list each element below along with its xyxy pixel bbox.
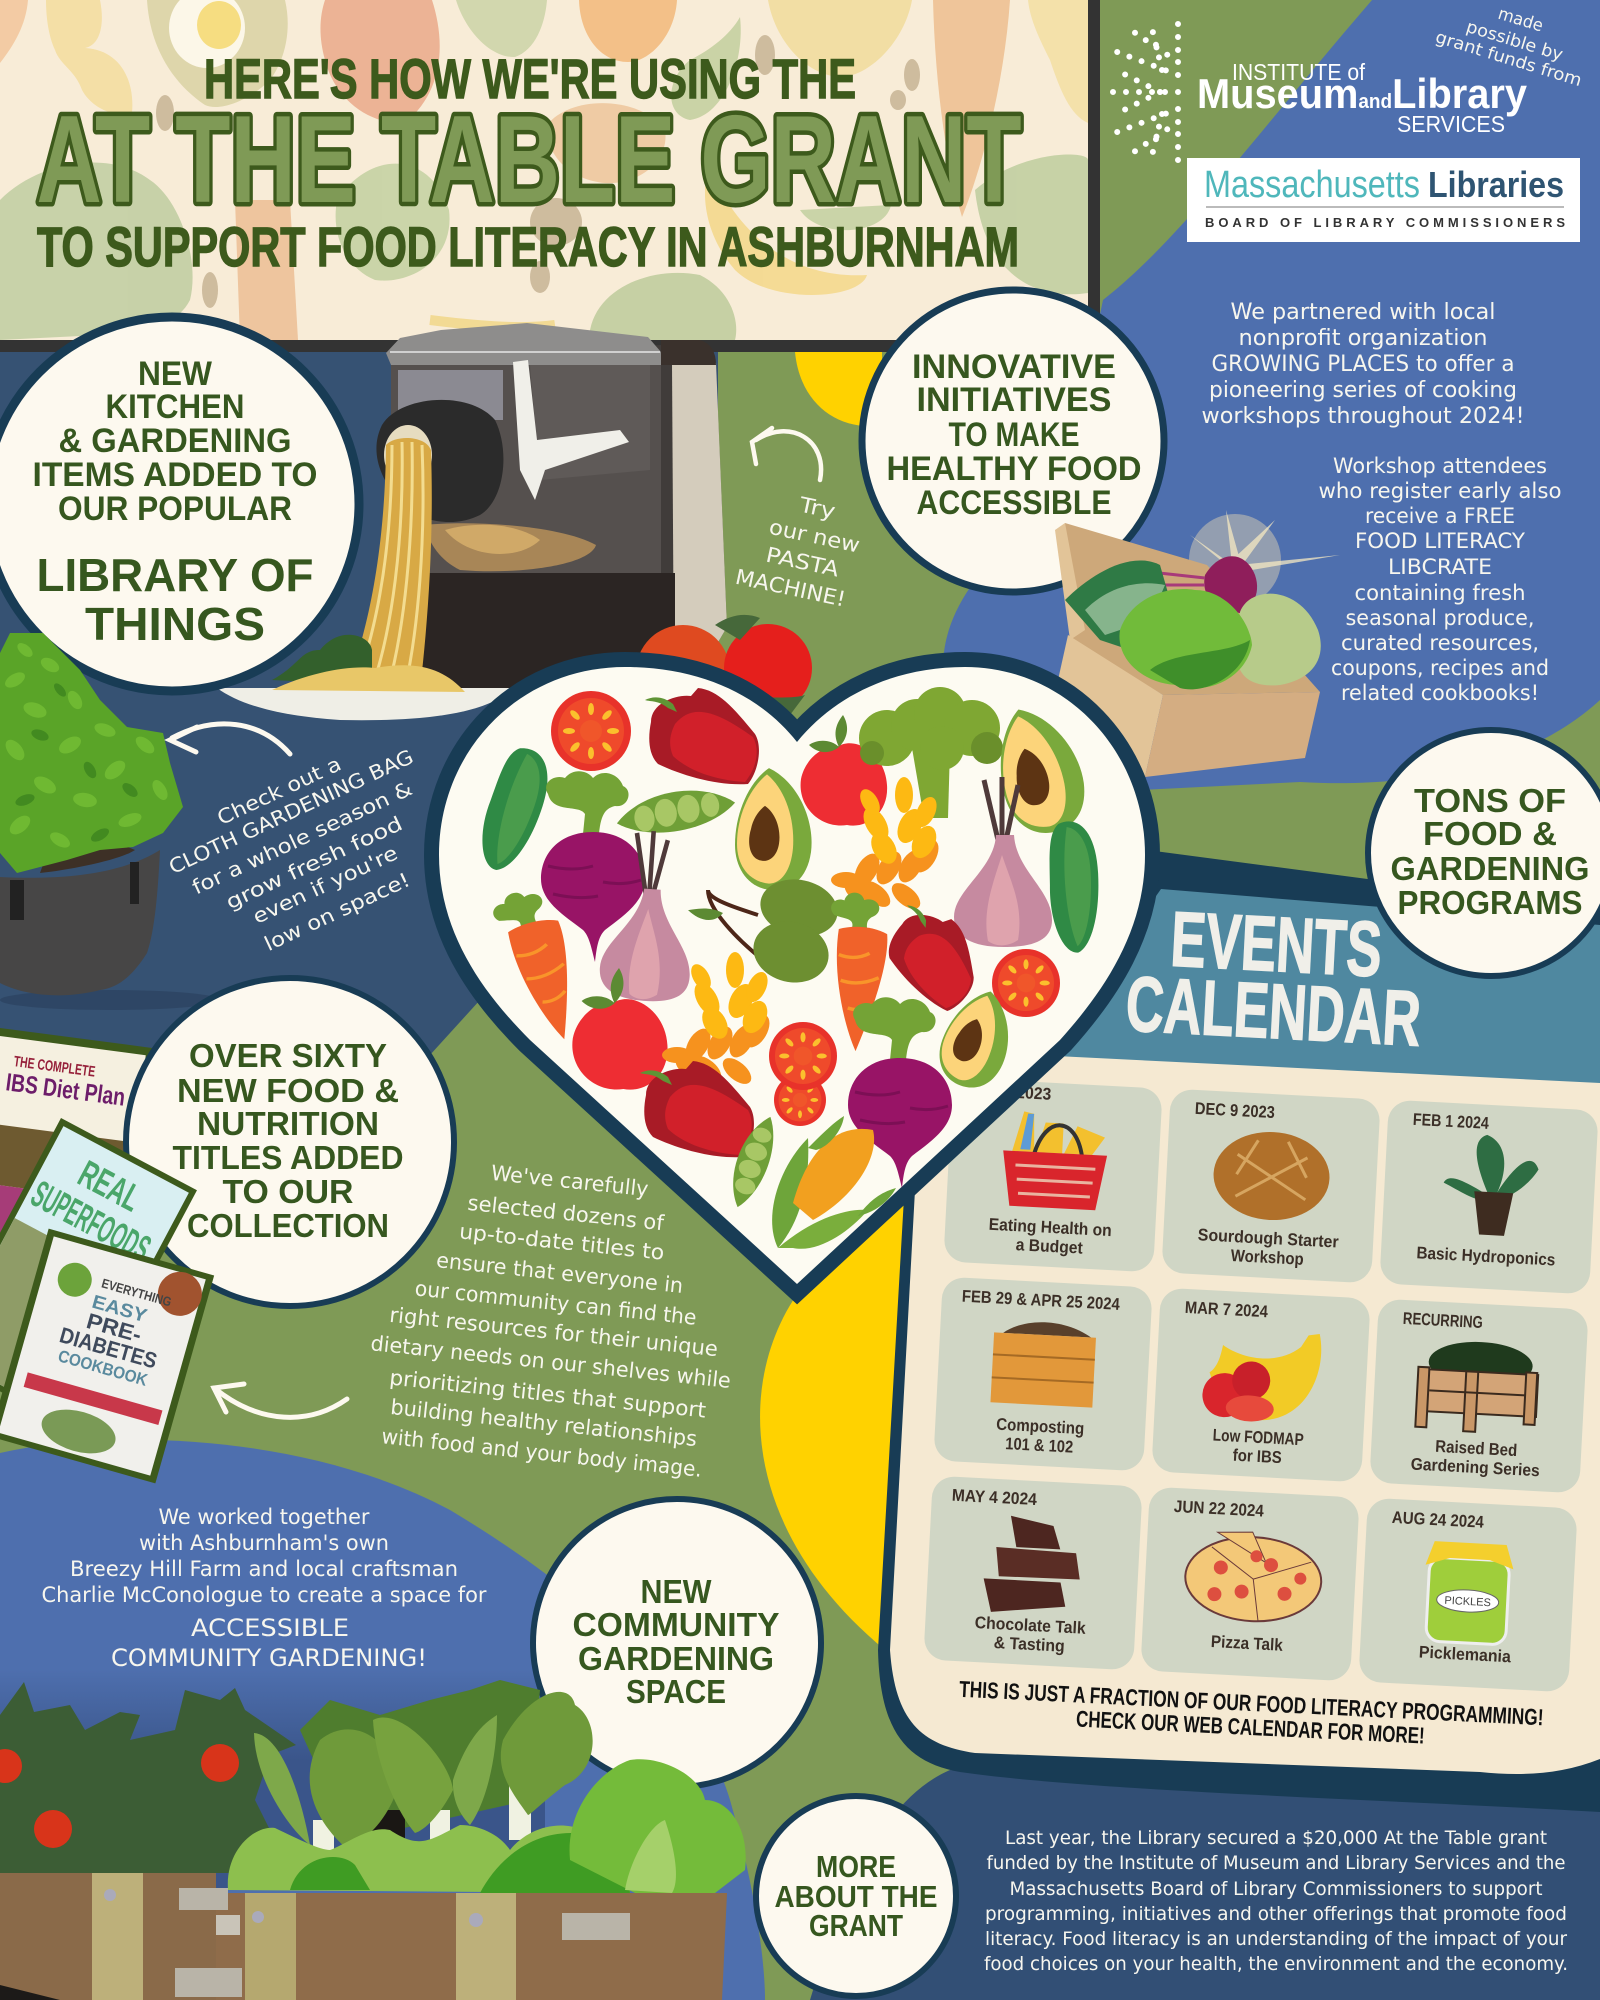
- event card: sourdough starter workshop: [1161, 1089, 1381, 1283]
- text: check out a cloth gardening bag: [165, 744, 417, 956]
- image: book easy pre-diabetes cookbook: EASY: [90, 1292, 149, 1327]
- text: fraction of our food literacy programming: CHECK OUR WEB CALENDAR FOR MORE!: [1075, 1706, 1425, 1749]
- event card: low fodmap for ibs: Low FODMAP: [1212, 1426, 1304, 1449]
- event card: basic hydroponics: [1379, 1100, 1599, 1294]
- image: lettuce: [228, 1759, 746, 1893]
- text: workshop attendees libcrate: [1318, 454, 1562, 705]
- panel: circle innovative initiatives: HEALTHY FOOD: [886, 450, 1142, 488]
- text: more about the grant paragraph: funded by the Institute of Museum and Library Services and the: [986, 1852, 1566, 1874]
- panel: circle library of things: KITCHEN: [106, 388, 244, 426]
- arrow: to pasta machine: [752, 428, 821, 480]
- panel: circle over sixty new titles: TO OUR: [222, 1173, 354, 1210]
- text: workshop attendees libcrate: coupons, recipes and: [1331, 656, 1549, 680]
- heading: events calendar: CALENDAR: [1124, 959, 1423, 1063]
- panel: circle more about the grant: MORE: [816, 1849, 896, 1884]
- text: workshop attendees libcrate: containing fresh: [1354, 581, 1526, 605]
- event card: picklemania: [1358, 1498, 1578, 1692]
- event card: composting: Composting: [996, 1415, 1085, 1438]
- panel: circle tons of food programs: FOOD &: [1423, 815, 1557, 852]
- panel: circle innovative initiatives: INNOVATIVE: [912, 348, 1116, 386]
- event card: chocolate talk and tasting: MAY 4 2024: [951, 1486, 1038, 1509]
- event card: picklemania: AUG 24 2024: [1391, 1508, 1485, 1532]
- panel: circle innovative initiatives: TO MAKE: [948, 416, 1080, 454]
- logo: Massachusetts Libraries: [1187, 158, 1580, 242]
- event card: basic hydroponics: FEB 1 2024: [1412, 1110, 1490, 1133]
- image: book ibs diet plan: [0, 1027, 155, 1311]
- image: raised garden bed with vegetables: [0, 1680, 746, 2000]
- panel: circle tons of food programs: PROGRAMS: [1398, 884, 1582, 921]
- image: bok choy: [254, 1680, 593, 1860]
- text: try our new pasta machine: MACHINE!: [733, 565, 848, 612]
- heading: events calendar: [1124, 895, 1423, 1063]
- image: pasta machine: [345, 323, 727, 690]
- image: book easy pre-diabetes cookbook: PRE-: [84, 1308, 144, 1347]
- text: check out a cloth gardening bag: for a whole season &: [188, 776, 416, 899]
- panel: circle library of things: & GARDENING: [58, 422, 292, 460]
- event card: eating health on a budget: Eating Health on: [988, 1215, 1112, 1240]
- text: workshop attendees libcrate: FOOD LITERACY: [1355, 529, 1525, 553]
- panel: circle new community gardening space: NEW: [640, 1573, 712, 1610]
- panel: circle over sixty new titles: NUTRITION: [197, 1105, 379, 1142]
- text: we worked together: Charlie McConologue to create a space for: [42, 1583, 487, 1607]
- event card: chocolate talk and tasting: & Tasting: [993, 1633, 1065, 1656]
- text: we partnered with local nonprofit: workshops throughout 2024!: [1202, 404, 1524, 429]
- event card: pizza talk: JUN 22 2024: [1173, 1497, 1265, 1521]
- text: we partnered with local nonprofit: nonprofit organization: [1238, 326, 1488, 351]
- heading: here's how we're using the: HERE'S HOW WE'RE USING THE: [204, 47, 856, 110]
- text: we partnered with local nonprofit: We partnered with local: [1230, 300, 1496, 325]
- event card: picklemania: Picklemania: [1418, 1643, 1512, 1666]
- image: plate of pasta: [217, 635, 513, 720]
- text: more about the grant paragraph: Last year, the Library secured a $20,000 At the Table grant: [1005, 1827, 1547, 1849]
- panel: circle innovative initiatives: INITIATIVES: [916, 381, 1112, 419]
- panel: circle library of things: ITEMS ADDED TO: [32, 456, 318, 494]
- panel: circle innovative initiatives: ACCESSIBLE: [916, 484, 1112, 522]
- arrow: to books: [214, 1384, 347, 1417]
- event card: sourdough starter workshop: DEC 9 2023: [1194, 1099, 1275, 1122]
- image: pasta noodles: [345, 438, 432, 690]
- event card: raised bed gardening series: Raised Bed: [1435, 1437, 1518, 1460]
- panel: circle library of things: THINGS: [85, 598, 265, 650]
- text: workshop attendees libcrate: seasonal produce,: [1346, 606, 1534, 630]
- heading: to support food literacy: TO SUPPORT FOOD LITERACY IN ASHBURNHAM: [37, 215, 1019, 278]
- image: book ibs diet plan: THE COMPLETE: [13, 1053, 96, 1081]
- text: we've carefully selected: selected dozens of: [467, 1191, 666, 1235]
- event card: raised bed gardening series: RECURRING: [1402, 1309, 1483, 1332]
- logo: Massachusetts Libraries: BOARD OF LIBRARY COMMISSIONERS: [1205, 215, 1565, 230]
- panel: circle new community gardening space: COMMUNITY: [572, 1606, 780, 1643]
- text: more about the grant paragraph: food choices on your health, the environment and the economy.: [984, 1953, 1568, 1975]
- panel: circle over sixty new titles: OVER SIXTY: [189, 1037, 387, 1074]
- image: book easy pre-diabetes cookbook: COOKBOOK: [56, 1346, 150, 1390]
- text: we've carefully selected: with food and your body image.: [380, 1424, 703, 1482]
- text: we worked together: [42, 1505, 487, 1672]
- logo: Institute of Museum and Library Services: MuseumandLibrary: [1197, 70, 1528, 117]
- text: workshop attendees libcrate: curated resources,: [1341, 631, 1539, 655]
- event card: composting: 101 & 102: [1005, 1434, 1074, 1457]
- logo: Institute of Museum and Library Services: SERVICES: [1397, 111, 1505, 137]
- text: more about the grant paragraph: programming, initiatives and other offerings that promote food: [985, 1903, 1567, 1925]
- arrow: to plant: [170, 724, 290, 754]
- panel: circle library of things: OUR POPULAR: [58, 490, 292, 528]
- event card: composting: FEB 29 & APR 25 2024: [961, 1287, 1121, 1314]
- logo: Institute of Museum and Library Services: INSTITUTE of: [1232, 59, 1366, 85]
- event card: picklemania: PICKLES: [1444, 1595, 1491, 1609]
- panel: circle library of things: LIBRARY OF: [36, 549, 314, 601]
- image: book real superfoods: REAL: [71, 1153, 147, 1220]
- text: we've carefully selected: ensure that everyone in: [435, 1248, 684, 1298]
- panel: circle new community gardening space: GARDENING: [578, 1640, 774, 1677]
- image: book easy pre-diabetes cookbook: DIABETES: [57, 1322, 160, 1374]
- image: libcrate box of produce: [1055, 510, 1340, 777]
- text: made possible by grant funds from: possible by: [1464, 17, 1565, 65]
- logo: Massachusetts Libraries: Massachusetts: [1204, 164, 1420, 206]
- event card: eating health on a budget: a Budget: [1015, 1235, 1084, 1258]
- heading: events calendar: EVENTS: [1169, 895, 1384, 993]
- text: try our new pasta machine: Try: [796, 492, 838, 524]
- image: book easy pre-diabetes cookbook: [0, 1229, 214, 1483]
- event card: basic hydroponics: Basic Hydroponics: [1416, 1243, 1556, 1270]
- text: workshop attendees libcrate: LIBCRATE: [1388, 555, 1492, 579]
- event card: raised bed gardening series: [1369, 1299, 1589, 1493]
- text: check out a cloth gardening bag: even if you're: [249, 841, 401, 929]
- text: we've carefully selected: up-to-date titles to: [458, 1219, 665, 1265]
- text: we worked together: ACCESSIBLE: [191, 1614, 349, 1642]
- event card: low fodmap for ibs: [1151, 1288, 1371, 1482]
- image: tomato plants: [0, 1682, 296, 1873]
- text: we've carefully selected: [369, 1161, 732, 1482]
- event card: sourdough starter workshop: Sourdough Starter: [1197, 1225, 1340, 1252]
- text: we worked together: COMMUNITY GARDENING!: [111, 1644, 427, 1672]
- event card: pizza talk: [1140, 1487, 1360, 1681]
- text: we partnered with local nonprofit: pioneering series of cooking: [1209, 378, 1517, 403]
- image: book real superfoods: SUPERFOODS: [24, 1173, 157, 1271]
- panel: title banner: [0, 0, 1100, 352]
- text: made possible by grant funds from: made: [1496, 4, 1545, 37]
- text: check out a cloth gardening bag: Check out a: [213, 751, 345, 830]
- panel: events calendar: [878, 850, 1600, 1812]
- text: workshop attendees libcrate: related cookbooks!: [1341, 681, 1539, 705]
- text: we've carefully selected: right resources for their unique: [388, 1303, 719, 1361]
- event card: chocolate talk and tasting: [923, 1476, 1143, 1670]
- text: check out a cloth gardening bag: grow fresh food: [222, 811, 406, 914]
- text: try our new pasta machine: PASTA: [764, 543, 842, 582]
- text: we've carefully selected: We've carefully: [490, 1161, 650, 1201]
- text: we've carefully selected: prioritizing titles that support: [388, 1365, 707, 1423]
- image: wooden planter: [0, 1873, 727, 2000]
- text: we worked together: Breezy Hill Farm and local craftsman: [70, 1557, 458, 1581]
- panel: circle over sixty new titles: [126, 978, 454, 1306]
- text: we've carefully selected: building healthy relationships: [389, 1395, 698, 1451]
- text: workshop attendees libcrate: who register early also: [1318, 479, 1562, 503]
- event card: eating health on a budget: 2023: [1016, 1083, 1052, 1104]
- event card: sourdough starter workshop: Workshop: [1230, 1246, 1304, 1269]
- panel: circle tons of food programs: [1368, 730, 1600, 976]
- event card: low fodmap for ibs: MAR 7 2024: [1184, 1298, 1269, 1321]
- text: more about the grant paragraph: literacy. Food literacy is an understanding of the impact of your: [985, 1928, 1567, 1950]
- panel: circle new community gardening space: [533, 1499, 821, 1787]
- text: we worked together: We worked together: [158, 1505, 370, 1529]
- image: tomatoes: [636, 615, 812, 719]
- image: book easy pre-diabetes cookbook: EVERYTHING: [100, 1276, 173, 1310]
- panel: circle tons of food programs: GARDENING: [1390, 850, 1590, 887]
- event card: pizza talk: Pizza Talk: [1210, 1632, 1284, 1655]
- text: we worked together: with Ashburnham's own: [139, 1531, 389, 1555]
- event card: chocolate talk and tasting: Chocolate Talk: [974, 1613, 1087, 1638]
- text: we partnered with local nonprofit: [1202, 300, 1524, 429]
- text: more about the grant paragraph: Massachusetts Board of Library Commissioners to support: [1010, 1878, 1542, 1900]
- text: workshop attendees libcrate: Workshop attendees: [1333, 454, 1547, 478]
- panel: circle library of things: [0, 317, 359, 691]
- image: book ibs diet plan: IBS Diet Plan: [4, 1068, 127, 1112]
- text: we partnered with local nonprofit: GROWING PLACES to offer a: [1212, 352, 1514, 377]
- chart: heart of vegetables: [439, 667, 1145, 1284]
- image: plant in cloth gardening bag: [0, 633, 220, 1010]
- logo: Institute of Museum and Library Services: [1100, 14, 1528, 172]
- text: more about the grant paragraph: [984, 1827, 1568, 1975]
- panel: circle more about the grant: ABOUT THE: [774, 1879, 938, 1914]
- event card: composting: [933, 1277, 1153, 1471]
- panel: circle more about the grant: GRANT: [809, 1908, 903, 1943]
- text: we've carefully selected: dietary needs on our shelves while: [369, 1331, 732, 1393]
- text: workshop attendees libcrate: receive a FREE: [1365, 504, 1515, 528]
- panel: circle more about the grant: [756, 1796, 956, 1996]
- text: check out a cloth gardening bag: CLOTH GARDENING BAG: [165, 744, 417, 879]
- text: try our new pasta machine: [733, 492, 862, 612]
- text: made possible by grant funds from: grant funds from: [1433, 27, 1584, 91]
- text: we've carefully selected: our community can find the: [414, 1276, 698, 1330]
- image: book real superfoods: [0, 1118, 197, 1429]
- event card: raised bed gardening series: Gardening Series: [1410, 1455, 1540, 1480]
- panel: circle innovative initiatives: [862, 290, 1164, 592]
- heading: at the table grant: AT THE TABLE GRANT: [36, 91, 1022, 229]
- panel: circle tons of food programs: TONS OF: [1414, 782, 1566, 819]
- logo: Massachusetts Libraries: Libraries: [1428, 164, 1564, 205]
- panel: circle over sixty new titles: TITLES ADDED: [172, 1139, 404, 1176]
- text: made possible by grant funds from: [1433, 4, 1584, 91]
- panel: circle library of things: NEW: [138, 355, 213, 393]
- event card: low fodmap for ibs: for IBS: [1232, 1446, 1282, 1467]
- text: try our new pasta machine: our new: [767, 515, 862, 557]
- panel: circle new community gardening space: SPACE: [626, 1673, 726, 1710]
- event card: eating health on a budget: [943, 1078, 1163, 1272]
- panel: circle over sixty new titles: NEW FOOD &: [177, 1072, 399, 1109]
- panel: circle over sixty new titles: COLLECTION: [187, 1207, 389, 1244]
- text: check out a cloth gardening bag: low on space!: [260, 867, 414, 956]
